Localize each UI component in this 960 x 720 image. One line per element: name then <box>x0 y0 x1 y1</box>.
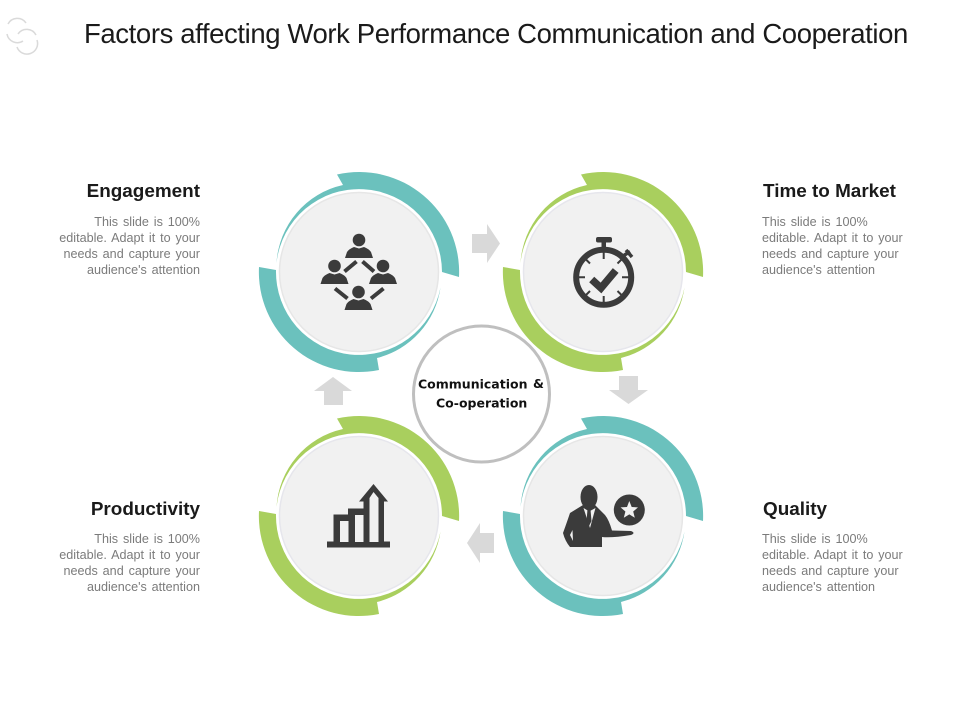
text block: productivity: Productivity <box>91 499 200 520</box>
icon: stopwatch with check <box>576 237 632 305</box>
text block: quality: audience's attention <box>762 580 875 594</box>
icon: team network <box>320 234 397 310</box>
text block: time to market: audience's attention <box>762 263 875 277</box>
text block: quality: editable. Adapt it to your <box>762 548 903 562</box>
text block: quality: Quality <box>763 499 828 520</box>
text block: engagement <box>59 181 201 277</box>
text block: productivity: This slide is 100% <box>94 532 200 546</box>
panel: engagement ring <box>259 172 459 372</box>
panel: productivity ring <box>259 416 459 616</box>
text block: time to market: This slide is 100% <box>762 215 868 229</box>
arrow: up <box>314 377 352 405</box>
text block: engagement: This slide is 100% <box>94 215 200 229</box>
arrow: left <box>467 523 494 563</box>
text block: time to market: Time to Market <box>763 181 897 202</box>
panel: time to market ring <box>503 172 703 372</box>
text block: quality <box>762 499 903 594</box>
arrow: right <box>472 224 500 263</box>
title: Factors affecting Work Performance Communication and Cooperation <box>84 18 908 49</box>
text block: engagement: needs and capture your <box>63 247 200 261</box>
text block: engagement: audience's attention <box>87 263 200 277</box>
icon: businessman with star badge <box>563 485 645 547</box>
text block: engagement: editable. Adapt it to your <box>59 231 200 245</box>
center circle: communication and co-operation: & <box>533 376 544 391</box>
text block: time to market <box>762 181 903 277</box>
center circle: communication and co-operation: Co-operation <box>436 396 527 410</box>
arrow: down <box>609 376 648 404</box>
text block: time to market: needs and capture your <box>762 247 899 261</box>
icon: growth bar chart with arrow <box>327 484 390 548</box>
center circle: communication and co-operation: Communication <box>418 376 528 392</box>
text block: quality: This slide is 100% <box>762 532 868 546</box>
text block: productivity: editable. Adapt it to your <box>59 548 200 562</box>
text block: quality: needs and capture your <box>762 564 899 578</box>
text block: productivity: needs and capture your <box>63 564 200 578</box>
center circle: communication and co-operation <box>414 326 550 462</box>
text block: productivity: audience's attention <box>87 580 200 594</box>
panel: quality ring <box>503 416 703 616</box>
text block: productivity <box>59 499 200 594</box>
text block: time to market: editable. Adapt it to your <box>762 231 903 245</box>
text block: engagement: Engagement <box>87 181 201 202</box>
icon: logo rings <box>7 18 38 54</box>
